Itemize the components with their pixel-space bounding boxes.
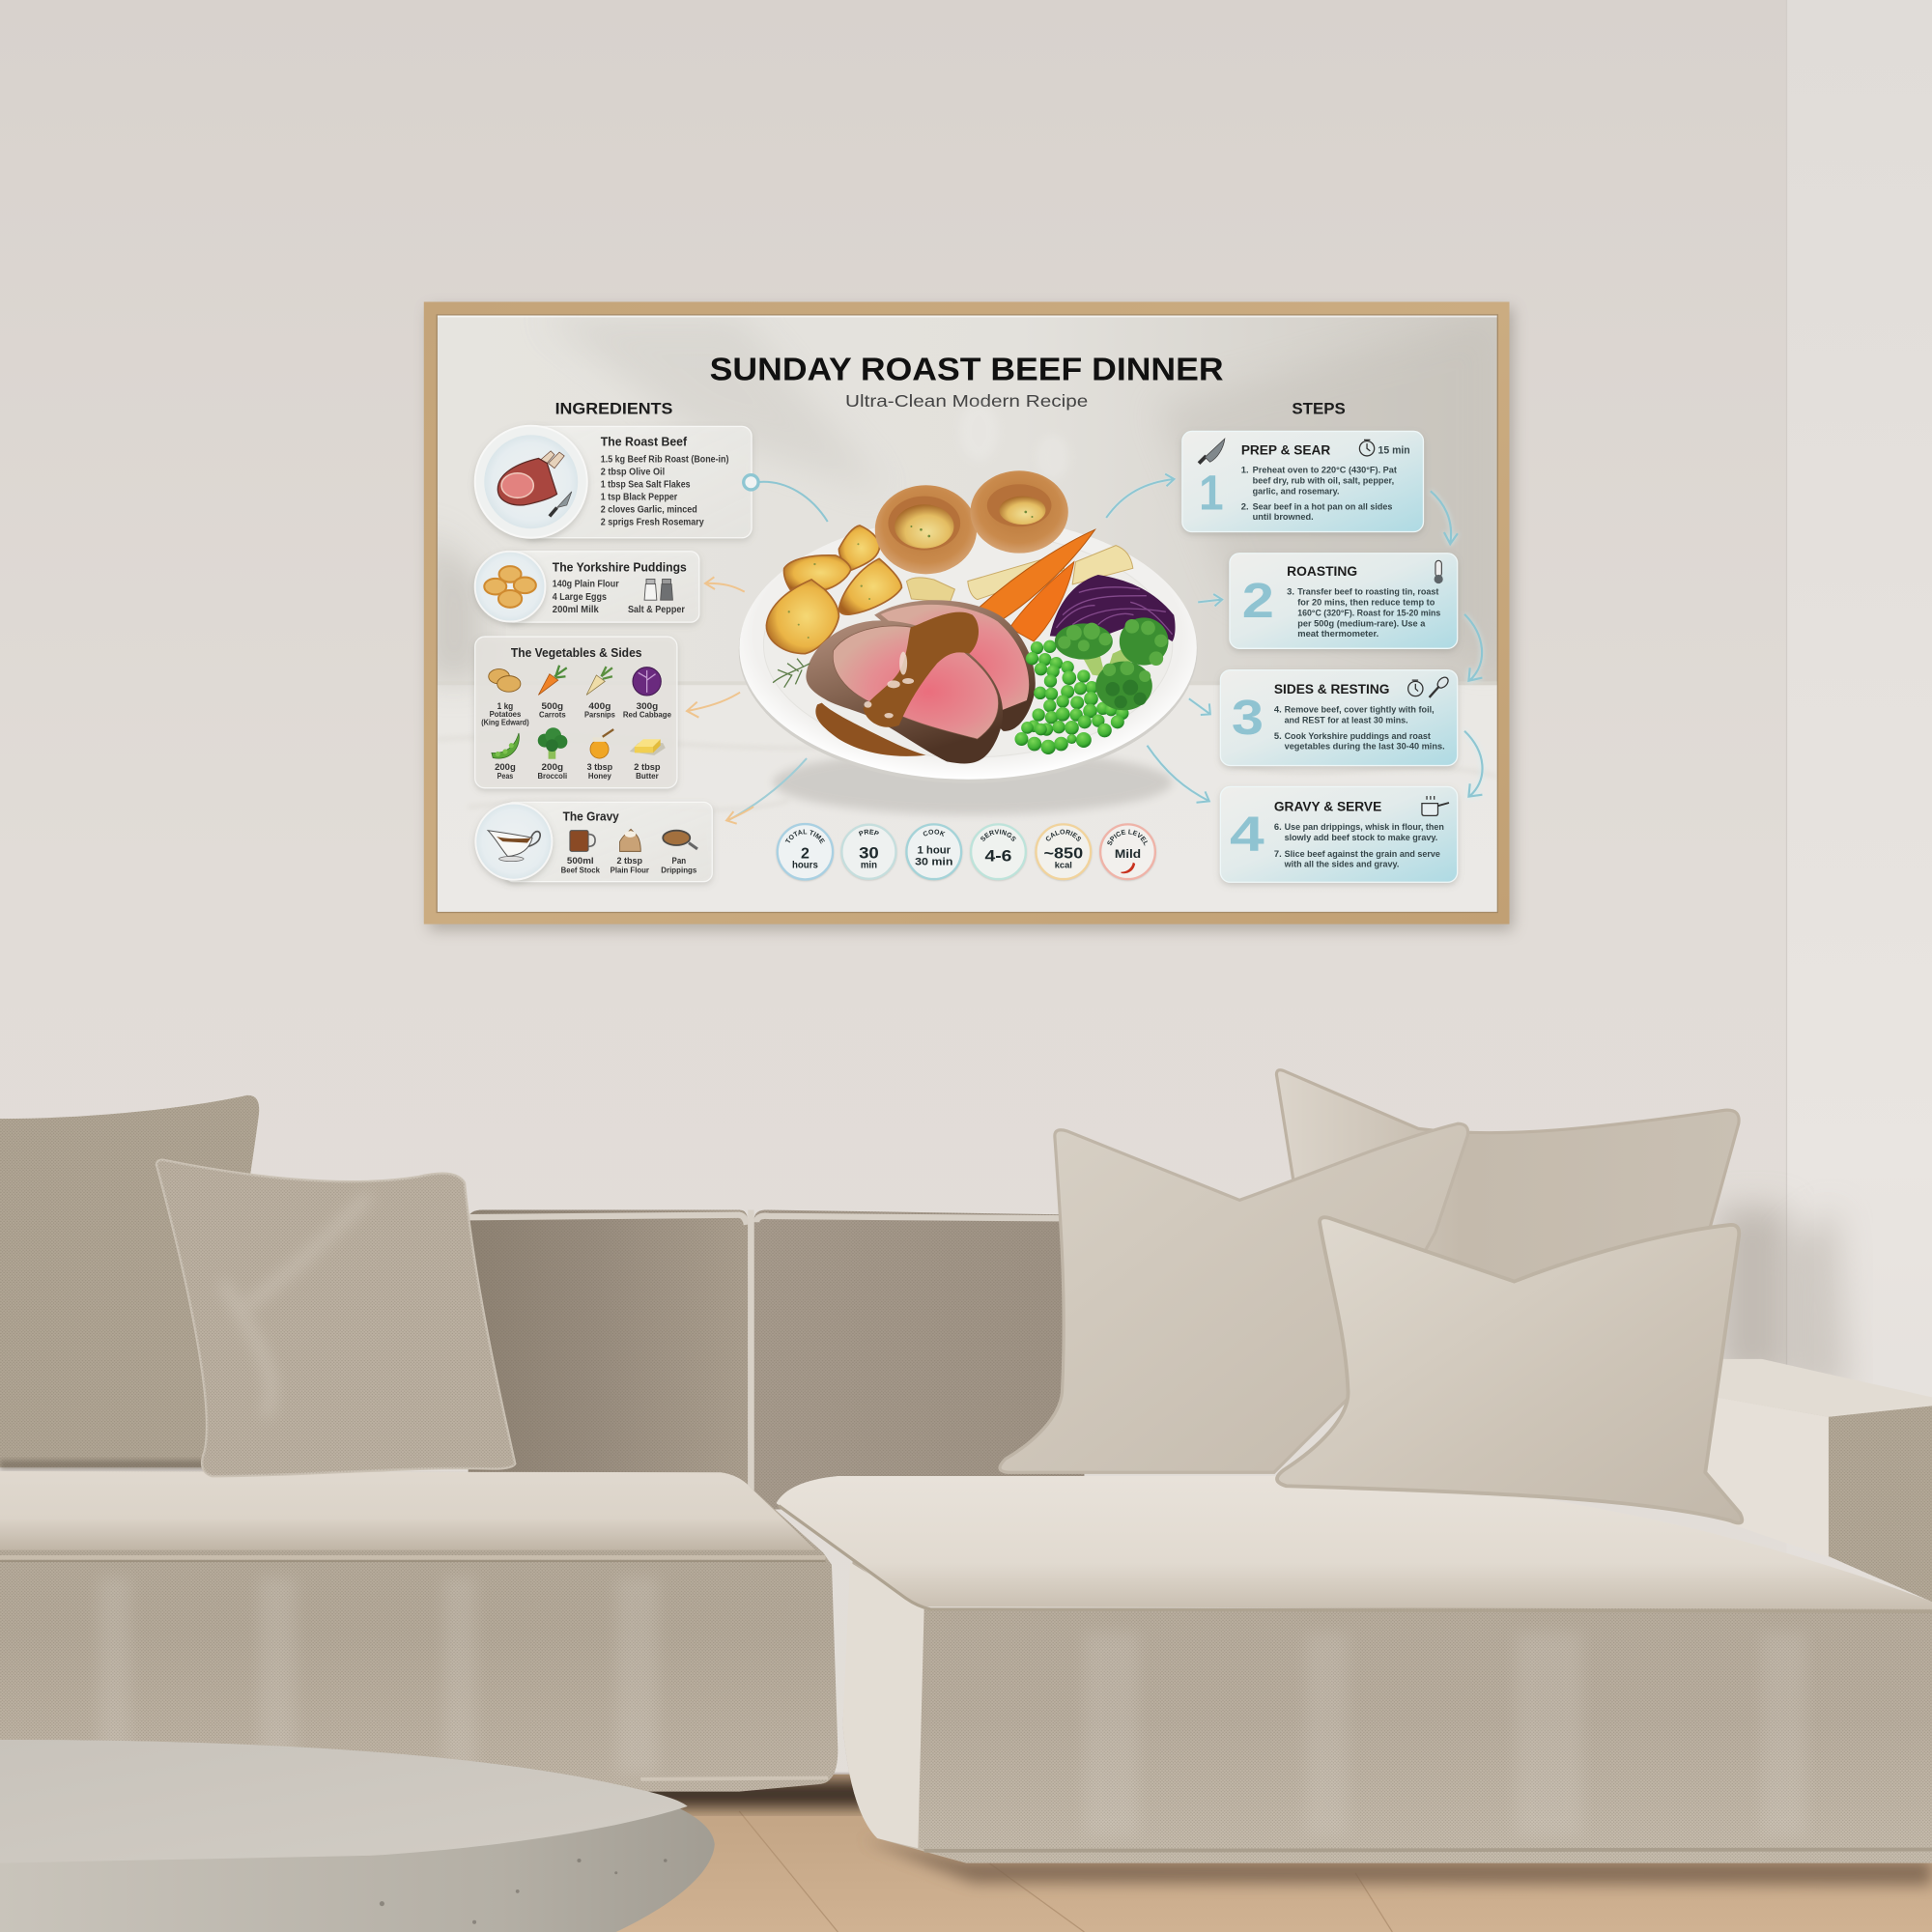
potatoes xyxy=(766,526,901,654)
step connectors xyxy=(1431,491,1483,797)
stat: cook: 30 min xyxy=(915,856,953,867)
icon: timer xyxy=(1359,440,1375,456)
stat: calories: CALORIES xyxy=(1045,829,1082,841)
arrow: step one to step two xyxy=(1431,491,1458,544)
step number: 2 xyxy=(1242,573,1274,628)
stat: servings xyxy=(970,823,1028,881)
icon: timer and whisk xyxy=(1408,675,1450,697)
connector: plate to gravy xyxy=(726,758,807,824)
step text: Slice beef against the grain and serve xyxy=(1285,848,1440,859)
step text: 5. xyxy=(1274,730,1282,741)
icon: red cabbage xyxy=(633,668,661,696)
title: SUNDAY ROAST BEEF DINNER xyxy=(710,352,1224,387)
step text: 1. xyxy=(1241,464,1249,474)
step text: until browned. xyxy=(1253,511,1314,522)
yorkshire list: 4 Large Eggs xyxy=(553,592,607,603)
icon: chili xyxy=(1121,863,1135,873)
icon: potatoes xyxy=(489,669,521,692)
vegetable labels row one xyxy=(481,700,671,727)
gravy xyxy=(815,612,979,756)
icon: pan xyxy=(663,831,697,849)
step number: 4 xyxy=(1230,806,1264,861)
ingredient list: The Roast Beef xyxy=(601,435,688,449)
vegetable labels row two xyxy=(495,761,661,781)
step text: 6. xyxy=(1274,821,1282,832)
frame xyxy=(424,301,1513,930)
vegetable labels row one: 400g xyxy=(588,700,611,711)
step heading: GRAVY & SERVE xyxy=(1274,799,1381,814)
step number: 1 xyxy=(1199,465,1224,520)
vegetable labels row one: Parsnips xyxy=(584,710,615,719)
step text: 2. xyxy=(1241,500,1249,511)
carrots xyxy=(980,529,1094,641)
stat: cook xyxy=(904,823,963,881)
gravy labels: Beef Stock xyxy=(561,865,600,874)
yorkshire pudding left xyxy=(875,485,977,574)
step 1 card xyxy=(1182,431,1423,532)
gravy labels: 500ml xyxy=(567,856,594,866)
connector: plate to step three xyxy=(1189,698,1210,715)
icon: broccoli xyxy=(538,727,567,759)
stat: servings: SERVINGS xyxy=(980,829,1016,841)
stat: prep: PREP xyxy=(858,829,879,837)
meat front slice xyxy=(806,620,1003,763)
step text: Preheat oven to 220°C (430°F). Pat xyxy=(1253,464,1398,474)
vegetable labels row one: Red Cabbage xyxy=(623,710,671,719)
meat back slice xyxy=(874,600,1036,731)
vegetable labels row one: 300g xyxy=(637,700,658,711)
icon: butter xyxy=(630,739,666,755)
sofa: front large pillow xyxy=(1000,1123,1468,1472)
yorkshire title: The Yorkshire Puddings xyxy=(553,559,687,574)
subtitle: Ultra-Clean Modern Recipe xyxy=(845,391,1088,411)
step text: per 500g (medium-rare). Use a xyxy=(1297,618,1426,629)
stat: calories xyxy=(1035,823,1093,881)
vegetables title: The Vegetables & Sides xyxy=(511,645,642,660)
ingredient list: 2 cloves Garlic, minced xyxy=(601,505,697,516)
ingredient list: 1.5 kg Beef Rib Roast (Bone-in) xyxy=(601,454,728,465)
stat: spice level: Mild xyxy=(1115,847,1141,861)
peas xyxy=(1014,640,1128,754)
icon: peas xyxy=(492,733,519,758)
red cabbage xyxy=(1050,575,1176,641)
stat: cook: 1 hour xyxy=(917,844,952,856)
connector: plate to yorkshire xyxy=(705,577,745,592)
vegetable labels row two: 2 tbsp xyxy=(634,761,661,772)
stat: spice level: SPICE LEVEL xyxy=(1107,829,1148,846)
sofa: left back pillow xyxy=(0,1095,259,1470)
panel: the gravy xyxy=(475,802,712,882)
vegetable labels row two: 200g xyxy=(495,761,516,772)
sofa: back cushion centre xyxy=(748,1210,1084,1509)
step text: for 20 mins, then reduce temp to xyxy=(1297,597,1435,608)
step heading: ROASTING xyxy=(1287,563,1357,579)
step text: Sear beef in a hot pan on all sides xyxy=(1253,500,1392,511)
gravy labels: Drippings xyxy=(661,865,697,874)
step text: garlic, and rosemary. xyxy=(1253,485,1339,496)
icon: parsnip xyxy=(586,667,612,695)
icon: gravy boat xyxy=(475,804,552,880)
plate xyxy=(739,517,1198,783)
arrow: step three to step four xyxy=(1464,731,1483,797)
step 3 card xyxy=(1220,670,1458,765)
step text: 4. xyxy=(1274,704,1282,715)
sofa: right chaise seat xyxy=(777,1476,1932,1863)
stat: prep: min xyxy=(861,861,877,871)
floor xyxy=(0,1775,1932,1932)
vegetable labels row one: (King Edward) xyxy=(481,719,529,727)
arrow: step two to step three xyxy=(1464,614,1482,681)
vegetable labels row two: Honey xyxy=(588,772,611,781)
step text xyxy=(1241,464,1398,522)
stat: calories: kcal xyxy=(1055,861,1072,870)
stat: servings: 4-6 xyxy=(984,846,1011,865)
connector: plate to step one xyxy=(1106,474,1175,518)
yorkshire pudding right xyxy=(970,470,1068,554)
icon: honey jar xyxy=(590,729,613,758)
yorkshire list: 140g Plain Flour xyxy=(553,579,619,589)
stat: calories: ~850 xyxy=(1043,846,1083,863)
vegetable labels row two: Butter xyxy=(636,772,660,781)
step 2 card xyxy=(1230,554,1458,648)
sofa: back right pillow xyxy=(1276,1070,1739,1368)
stat: prep: 30 xyxy=(859,844,879,863)
step text: 7. xyxy=(1274,848,1282,859)
icon: thermometer xyxy=(1435,560,1443,583)
step text: meat thermometer. xyxy=(1297,628,1378,639)
ingredient list: 1 tbsp Sea Salt Flakes xyxy=(601,480,691,491)
rosemary sprig xyxy=(773,659,810,688)
plate shadow xyxy=(773,751,1173,814)
stat: total time xyxy=(776,823,835,882)
vegetable labels row one: Carrots xyxy=(539,710,566,719)
stat: cook: COOK xyxy=(923,829,945,837)
icon: flour sack xyxy=(620,829,640,851)
sofa: small left pillow xyxy=(156,1160,515,1476)
icon: carrot xyxy=(538,666,567,695)
stat: total time: TOTAL TIME xyxy=(784,829,825,844)
yorkshire list: 200ml Milk xyxy=(553,605,599,615)
stat: total time: 2 xyxy=(801,845,810,862)
step text xyxy=(1287,586,1440,639)
yorkshire list: Salt & Pepper xyxy=(628,605,685,615)
ingredient list: 1 tsp Black Pepper xyxy=(601,493,677,503)
icon: yorkshire puddings xyxy=(475,552,545,621)
stat: total time: hours xyxy=(792,861,818,871)
step text: with all the sides and gravy. xyxy=(1284,859,1399,869)
step text: 160°C (320°F). Roast for 15-20 mins xyxy=(1297,608,1440,618)
stat: spice level xyxy=(1099,823,1157,881)
framed infographic xyxy=(422,301,1520,937)
parsnips xyxy=(906,546,1133,602)
step text: Use pan drippings, whisk in flour, then xyxy=(1285,821,1444,832)
stat: prep xyxy=(840,823,897,881)
step text: Cook Yorkshire puddings and roast xyxy=(1285,730,1432,741)
step text: and REST for at least 30 mins. xyxy=(1285,714,1408,724)
sofa: left seat cushion xyxy=(0,1471,838,1792)
step number: 3 xyxy=(1232,690,1264,745)
step text: beef dry, rub with oil, salt, pepper, xyxy=(1253,474,1394,485)
gravy labels xyxy=(561,856,697,874)
heading: ingredients: INGREDIENTS xyxy=(555,400,672,418)
connector: plate to roast beef xyxy=(744,475,828,522)
gravy labels: Pan xyxy=(672,856,686,866)
connector: plate to vegetables xyxy=(687,693,740,718)
gravy labels: Plain Flour xyxy=(611,865,650,874)
panel: the vegetables and sides xyxy=(475,637,677,788)
connector: plate to step four xyxy=(1147,746,1209,803)
sofa: back cushion left xyxy=(469,1210,748,1503)
step text: Transfer beef to roasting tin, roast xyxy=(1297,586,1439,597)
vegetable labels row one: Potatoes xyxy=(490,710,522,719)
icon: beef stock jug xyxy=(570,831,595,851)
vegetable labels row two: 200g xyxy=(542,761,563,772)
stone coffee table xyxy=(0,1740,715,1932)
gravy title: The Gravy xyxy=(563,809,619,823)
step heading: PREP & SEAR xyxy=(1241,442,1330,458)
vegetable labels row one: 1 kg xyxy=(497,700,513,711)
step text xyxy=(1274,704,1445,752)
step text xyxy=(1274,821,1444,869)
step text: 3. xyxy=(1287,586,1294,597)
ingredient list xyxy=(601,435,728,528)
food plate and stats drawn at zoom scale xyxy=(685,401,1246,882)
ingredient list: 2 tbsp Olive Oil xyxy=(601,467,665,477)
step text: vegetables during the last 30-40 mins. xyxy=(1285,741,1445,752)
steam xyxy=(959,403,1069,480)
yorkshire list xyxy=(553,579,685,615)
duration: 15 min xyxy=(1378,444,1410,456)
icon: beef rib roast xyxy=(475,426,587,538)
vegetable labels row two: Peas xyxy=(497,772,514,781)
sofa: right arm xyxy=(1688,1359,1932,1602)
step text: slowly add beef stock to make gravy. xyxy=(1285,832,1437,842)
vegetable labels row two: Broccoli xyxy=(538,772,567,781)
connector: plate to step two xyxy=(1198,594,1222,606)
vegetable labels row one: 500g xyxy=(542,700,563,711)
gravy labels: 2 tbsp xyxy=(617,856,643,866)
panel: the roast beef xyxy=(475,426,752,538)
step 4 card xyxy=(1220,786,1458,882)
heading: steps: STEPS xyxy=(1292,400,1346,418)
step heading: SIDES & RESTING xyxy=(1274,681,1389,696)
icon: saucepan xyxy=(1422,796,1449,815)
step text: Remove beef, cover tightly with foil, xyxy=(1285,704,1435,715)
broccoli xyxy=(1055,617,1169,710)
panel: the yorkshire puddings xyxy=(475,552,699,622)
icon: salt and pepper xyxy=(644,579,672,600)
vegetable labels row two: 3 tbsp xyxy=(587,761,612,772)
sofa: front small pillow xyxy=(1277,1217,1742,1523)
poster background xyxy=(425,316,1497,912)
icon: knife xyxy=(1199,439,1225,464)
ingredient list: 2 sprigs Fresh Rosemary xyxy=(601,518,704,528)
